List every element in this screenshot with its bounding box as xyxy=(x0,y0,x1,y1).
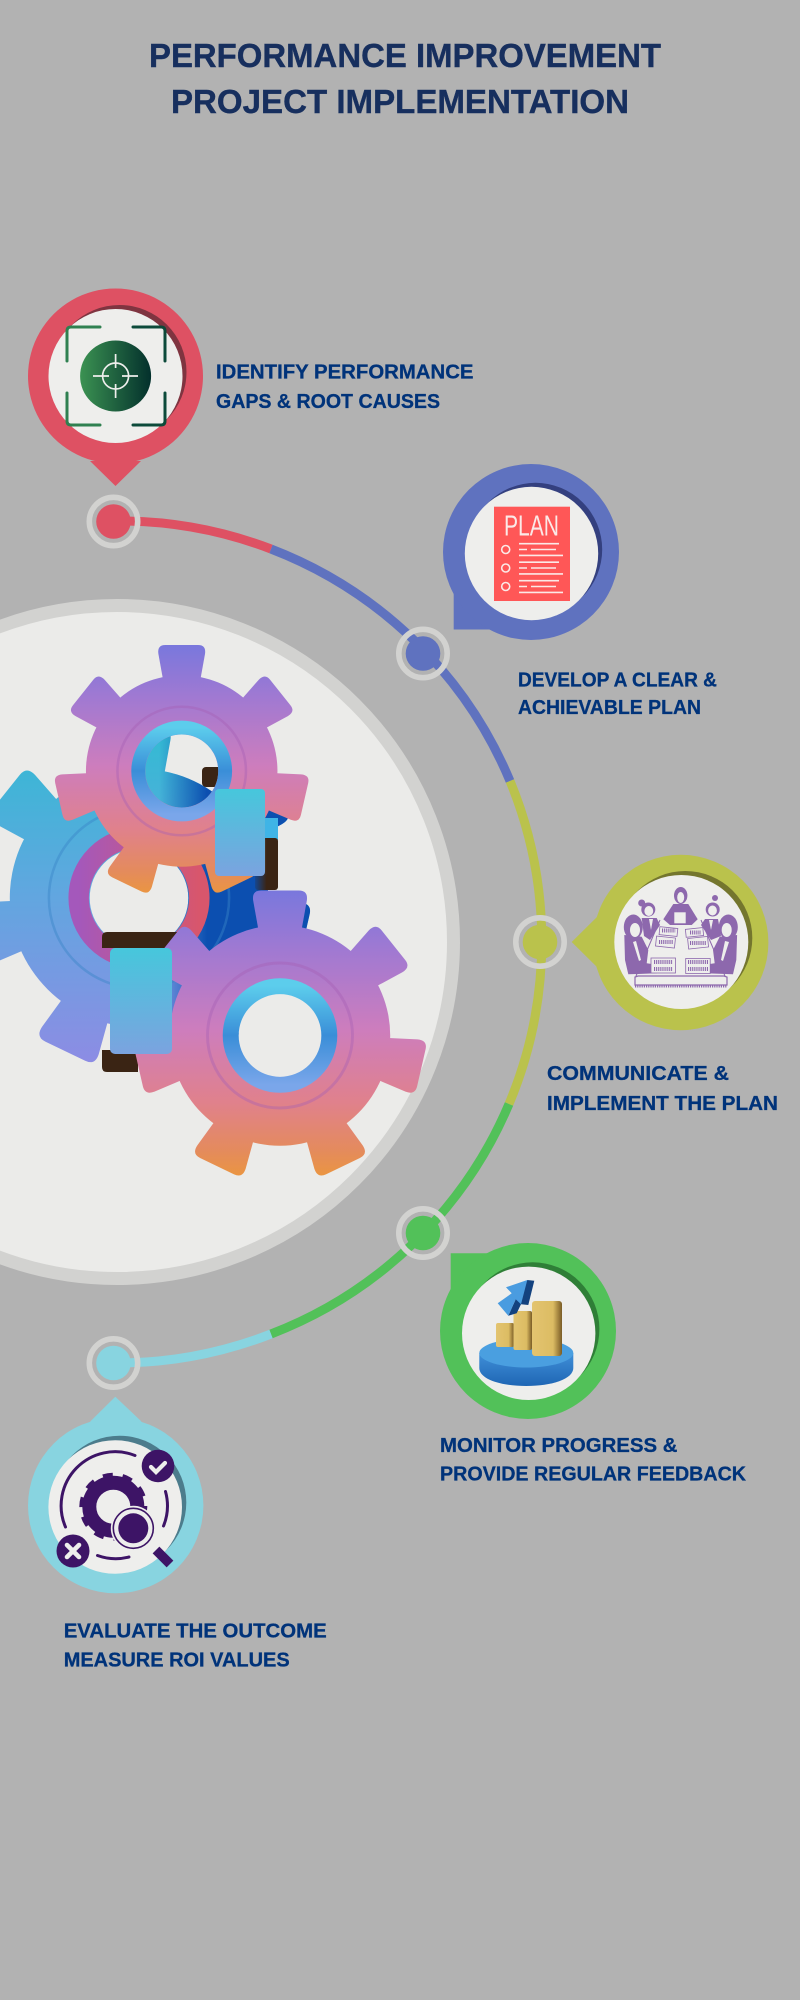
bubble shadow xyxy=(618,871,752,1005)
label 1: GAPS & ROOT CAUSES xyxy=(216,390,440,413)
label 1 xyxy=(216,360,474,413)
label 2: DEVELOP A CLEAR & xyxy=(518,668,717,692)
bubble shape xyxy=(572,914,600,970)
node 1 xyxy=(89,497,138,546)
bubble 5: evaluate xyxy=(28,1397,203,1593)
central disc with gears xyxy=(0,606,454,1278)
title: PROJECT IMPLEMENTATION xyxy=(171,84,629,121)
title: PERFORMANCE IMPROVEMENT xyxy=(149,38,662,75)
label 5 xyxy=(64,1620,327,1672)
bubble face xyxy=(465,487,598,620)
title xyxy=(149,38,662,121)
pin face xyxy=(48,309,182,443)
timeline arc xyxy=(113,521,542,1363)
bubble shadow xyxy=(466,1262,599,1396)
bubble shape xyxy=(454,593,490,630)
label 4: MONITOR PROGRESS & xyxy=(440,1434,678,1457)
label 3 xyxy=(547,1062,778,1115)
label 4: PROVIDE REGULAR FEEDBACK xyxy=(440,1463,746,1486)
node 3 xyxy=(516,918,564,966)
bottom pink gear xyxy=(136,890,426,1176)
people xyxy=(624,887,738,974)
cyan card top xyxy=(215,789,265,876)
label 2: ACHIEVABLE PLAN xyxy=(518,696,701,719)
bubble 4: monitor xyxy=(440,1243,616,1419)
node 2 xyxy=(399,629,447,678)
cyan card bottom xyxy=(110,948,172,1054)
bubble face xyxy=(48,1440,182,1574)
label 1: IDENTIFY PERFORMANCE xyxy=(216,360,474,384)
icon: gear evaluation xyxy=(56,1450,174,1568)
bubble shadow xyxy=(53,1436,186,1569)
label 5: MEASURE ROI VALUES xyxy=(64,1649,290,1672)
node 5 xyxy=(89,1339,138,1387)
label 3: COMMUNICATE & xyxy=(547,1062,729,1085)
label 4 xyxy=(440,1434,746,1486)
bubble shape xyxy=(451,1253,490,1292)
pin shadow xyxy=(52,305,186,439)
dark block top xyxy=(202,767,278,890)
bubble face xyxy=(462,1267,595,1400)
papers xyxy=(651,927,710,974)
icon: target xyxy=(67,327,165,425)
dark block bottom xyxy=(102,932,178,1072)
label 2 xyxy=(518,668,717,719)
faces and details xyxy=(630,892,732,961)
disc xyxy=(0,606,454,1278)
bubble face xyxy=(614,875,748,1009)
icon: plan document: PLAN xyxy=(504,511,559,543)
cyan strip behind top gear xyxy=(265,818,278,840)
table xyxy=(635,920,727,986)
pin 1: identify xyxy=(28,288,203,486)
left blue gear xyxy=(0,736,310,1062)
bubble shadow xyxy=(469,483,602,616)
node 4 xyxy=(399,1209,447,1257)
paper hatching xyxy=(654,930,708,969)
icon: bar chart on disk xyxy=(479,1280,573,1386)
pin shape xyxy=(28,288,203,486)
bubble 3: communicate xyxy=(572,855,768,1030)
bubble 2: plan xyxy=(443,464,619,640)
icon: meeting xyxy=(624,887,738,986)
bubble shape xyxy=(90,1397,142,1422)
label 5: EVALUATE THE OUTCOME xyxy=(64,1620,327,1643)
icon: plan document xyxy=(494,507,570,601)
label 3: IMPLEMENT THE PLAN xyxy=(547,1092,778,1115)
top pink gear xyxy=(54,645,308,893)
